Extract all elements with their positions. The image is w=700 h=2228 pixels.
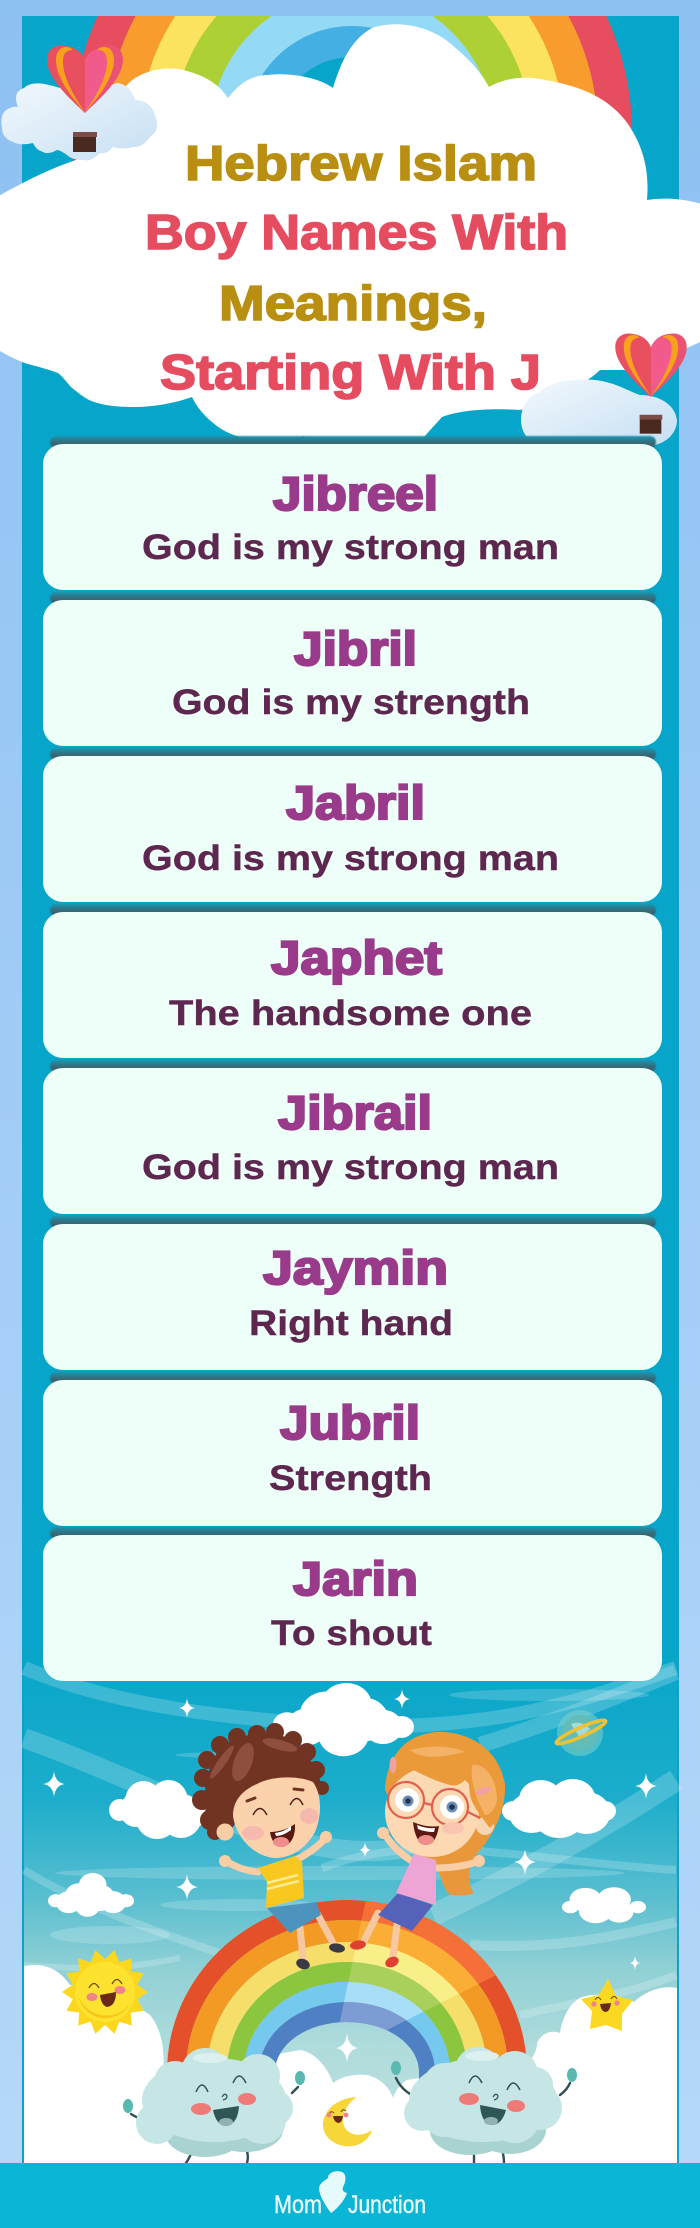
card 2: Jibril (43, 592, 662, 746)
shorts (267, 1902, 321, 1933)
card 4: Japhet (43, 904, 662, 1058)
girl character (349, 1732, 505, 1969)
title line 3: Meanings, (219, 277, 487, 331)
cloud: lower right (562, 1887, 646, 1923)
card 6: Jaymin (43, 1216, 662, 1370)
hot air balloon: right (615, 334, 687, 434)
sparkles (43, 1689, 657, 1970)
face (385, 1767, 479, 1857)
card 2: Jibril: God is my strength (172, 683, 530, 722)
shirt (258, 1856, 304, 1908)
moon character (323, 2097, 372, 2146)
card 3: Jabril (43, 748, 662, 902)
fringe (385, 1732, 505, 1828)
header rainbow (73, 16, 632, 161)
card 1: Jibreel: God is my strong man (142, 528, 559, 567)
sparkle under the rainbow (336, 2033, 358, 2063)
star character (581, 1979, 633, 2031)
logo icon (319, 2171, 347, 2213)
logo wordmark: Junction: Junction (348, 2191, 426, 2219)
card 7: Jubril: Strength (269, 1459, 432, 1498)
hot air balloon: top left (47, 45, 123, 152)
planet (555, 1710, 607, 1756)
skirt (378, 1893, 433, 1931)
mouth (413, 1822, 464, 1845)
lower white cloud bank (24, 1965, 677, 2163)
cloud: top centre (273, 1683, 414, 1756)
big white title cloud (0, 24, 700, 442)
card 5: Jibrail (43, 1060, 662, 1214)
small cloud: top left (1, 83, 157, 160)
hair clips (390, 1757, 492, 1797)
title line 2: Boy Names With (145, 206, 568, 260)
hair back and tail (385, 1732, 505, 1895)
ear (476, 1817, 494, 1835)
smiling cloud character: right (391, 2047, 577, 2163)
title line 4: Starting With J (160, 346, 541, 400)
boy character (192, 1723, 346, 1971)
legs and shoes (349, 1913, 400, 1969)
hair highlights (207, 1736, 299, 1784)
card 6: Jaymin: Jaymin (263, 1241, 448, 1294)
card 2: Jibril: Jibril (294, 622, 417, 675)
illustrated scene background (24, 1650, 677, 2163)
bottom rainbow (167, 1900, 526, 2079)
card 4: Japhet: The handsome one (169, 994, 532, 1033)
card 6: Jaymin: Right hand (249, 1304, 453, 1343)
cloud: middle left (109, 1780, 206, 1839)
top (396, 1854, 436, 1905)
hair back (192, 1723, 329, 1840)
card 4: Japhet: Japhet (271, 931, 442, 984)
smiling cloud character: left (123, 2048, 305, 2163)
face (233, 1777, 320, 1858)
logo wordmark: Mom: Mom (274, 2191, 322, 2219)
card 3: Jabril: Jabril (286, 776, 425, 829)
title (145, 137, 568, 400)
card 8: Jarin: Jarin (293, 1552, 418, 1605)
card 8: Jarin (43, 1527, 662, 1681)
card 8: Jarin: To shout (271, 1614, 432, 1653)
card 7: Jubril (43, 1372, 662, 1526)
card 1: Jibreel (43, 436, 662, 590)
footer bar (0, 2163, 700, 2228)
card 7: Jubril: Jubril (280, 1396, 420, 1449)
arms (228, 1839, 325, 1872)
sun character (62, 1950, 148, 2034)
legs and shoes (295, 1915, 346, 1971)
cloud: middle right (502, 1779, 616, 1838)
card 1: Jibreel: Jibreel (273, 467, 438, 520)
card 5: Jibrail: Jibrail (278, 1086, 432, 1139)
arms (386, 1836, 477, 1868)
MomJunction logo (274, 2171, 426, 2219)
cloud: lower left (48, 1873, 134, 1917)
face features (242, 1789, 318, 1847)
small cloud: right (521, 380, 677, 445)
title line 1: Hebrew Islam (185, 137, 537, 191)
card 3: Jabril: God is my strong man (142, 839, 559, 878)
card 5: Jibrail: God is my strong man (142, 1148, 559, 1187)
ear (216, 1824, 234, 1840)
glasses and eyes (388, 1782, 480, 1825)
